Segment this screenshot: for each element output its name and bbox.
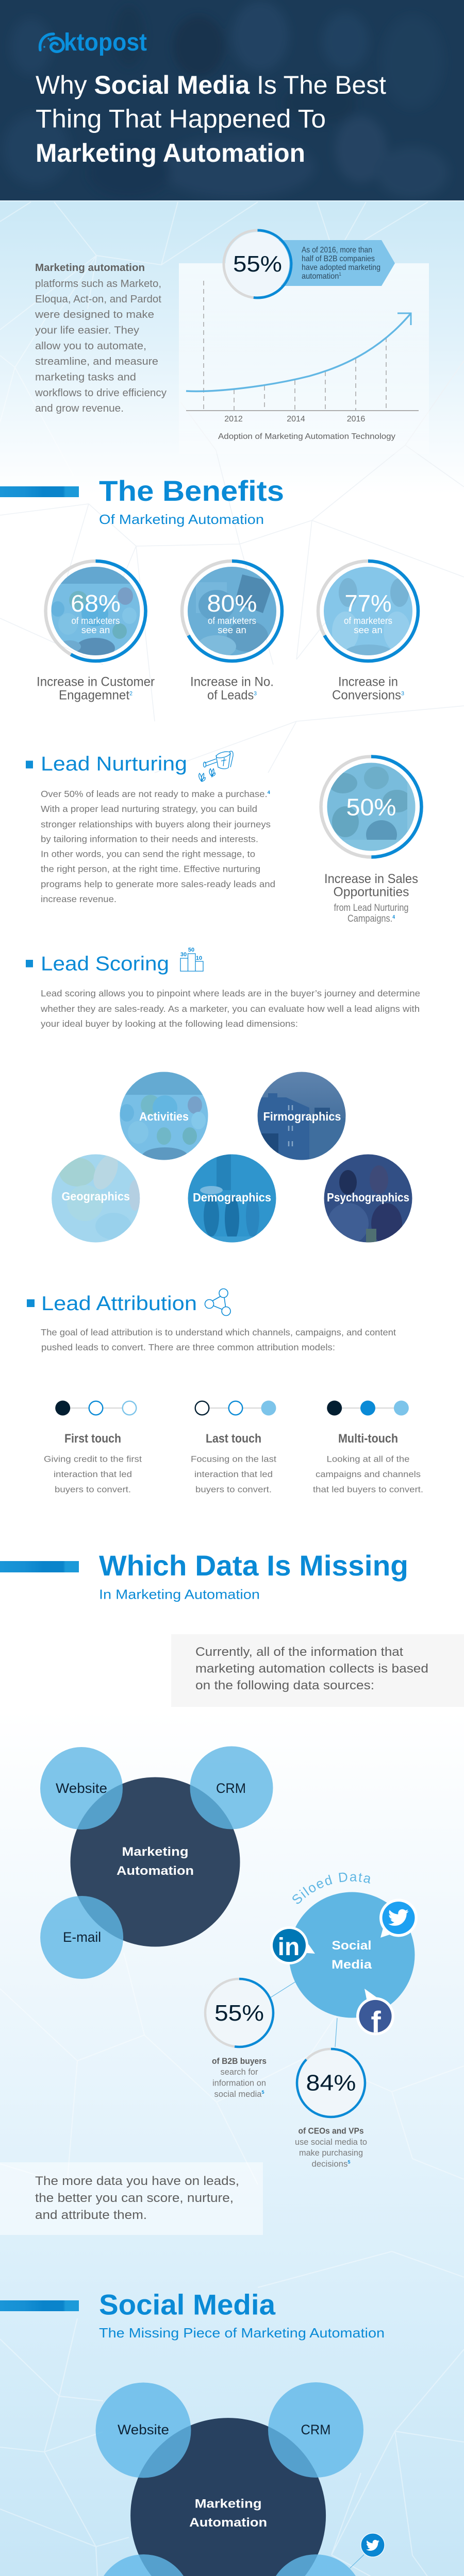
icon: score bars: 10 bbox=[196, 955, 202, 961]
text block: lead nurturing: In other words, you can send the right message, to bbox=[41, 849, 255, 859]
text block: lead attribution: The goal of lead attribution is to understand which channels, campaigns, and content bbox=[41, 1327, 396, 1337]
panel: more data callout: The more data you have on leads, bbox=[35, 2174, 239, 2188]
text block: lead nurturing: programs help to generate more sales-ready leads and bbox=[41, 879, 275, 889]
attribution model: first touch: buyers to convert. bbox=[55, 1485, 131, 1494]
icon: linkedin bubble: in bbox=[278, 1934, 300, 1961]
attribution model: last touch: buyers to convert. bbox=[195, 1485, 272, 1494]
stat: 55% of B2B buyers: 55% bbox=[214, 2001, 264, 2026]
stat: 50% sales opportunities: from Lead Nurturing bbox=[334, 903, 408, 913]
heading: Lead Scoring bbox=[26, 947, 203, 975]
dimension: Geographics bbox=[52, 1154, 140, 1243]
dimension: Geographics: Geographics bbox=[61, 1190, 130, 1203]
dimension: Demographics bbox=[186, 1154, 278, 1244]
attribution model: first touch: Giving credit to the first bbox=[44, 1455, 142, 1464]
diagram: marketing automation data sources: Marketing bbox=[122, 1845, 189, 1859]
attribution model: multi-touch: Looking at all of the bbox=[327, 1455, 409, 1464]
text block: lead nurturing: 4 bbox=[268, 790, 270, 795]
stat ring: 55%: 55% bbox=[233, 251, 282, 277]
text block: lead attribution: pushed leads to convert. There are three common attribution models: bbox=[41, 1342, 335, 1352]
stat: 84% of CEOs and VPs: of CEOs and VPs bbox=[298, 2127, 364, 2136]
text block: lead attribution bbox=[41, 1327, 396, 1352]
stat: 68% customer engagement: 68% bbox=[71, 590, 121, 617]
panel: more data callout: the better you can score, nurture, bbox=[35, 2191, 234, 2205]
diagram: marketing automation with social media bbox=[96, 2382, 385, 2576]
stat: 68% customer engagement: Increase in Customer bbox=[37, 675, 155, 689]
attribution model: first touch bbox=[44, 1400, 142, 1494]
icon: facebook bubble bbox=[356, 1989, 394, 2039]
callout: 55% ribbon: automation bbox=[302, 272, 342, 281]
header banner bbox=[0, 0, 464, 200]
icon: watering can bbox=[199, 751, 233, 782]
dimension: Firmographics bbox=[255, 1072, 348, 1162]
stat: 84% of CEOs and VPs: 84% bbox=[306, 2070, 356, 2096]
diagram: siloed social media: Media bbox=[332, 1958, 372, 1972]
stat: 50% sales opportunities: Opportunities bbox=[333, 885, 409, 900]
stat: 80% leads: of Leads bbox=[207, 688, 257, 703]
text block: lead scoring: your ideal buyer by looking at the following lead dimensions: bbox=[41, 1019, 298, 1029]
stat: 77% conversions: 3 bbox=[401, 690, 404, 697]
stat: 55% of B2B buyers: social media bbox=[214, 2090, 261, 2099]
chart: adoption line: 2014 bbox=[287, 415, 305, 423]
intro text block: your life easier. They bbox=[35, 325, 139, 336]
callout: 55% ribbon: 1 bbox=[339, 272, 341, 277]
stat: 80% leads: Increase in No. bbox=[190, 675, 274, 689]
heading: Social Media: The Missing Piece of Marketing Automation bbox=[99, 2325, 385, 2341]
panel: adoption chart bbox=[179, 230, 429, 454]
stat ring: 55% bbox=[224, 230, 291, 298]
intro text block: platforms such as Marketo, bbox=[35, 278, 161, 290]
heading: Lead Nurturing bbox=[26, 751, 233, 782]
intro text block: were designed to make bbox=[35, 309, 154, 320]
diagram: marketing automation data sources: E-mail bbox=[63, 1929, 101, 1945]
text block: lead scoring bbox=[40, 988, 420, 1029]
stat: 50% sales opportunities: Increase in Sales bbox=[324, 872, 418, 886]
stat: 80% leads: 80% bbox=[207, 590, 257, 617]
dimension: Psychographics bbox=[322, 1154, 415, 1244]
stat: 77% conversions: Increase in bbox=[338, 675, 398, 689]
stat: 80% leads: see an bbox=[218, 624, 246, 635]
icon: network nodes bbox=[205, 1289, 230, 1316]
dimension: Demographics: Demographics bbox=[193, 1191, 271, 1204]
attribution model: last touch: Last touch bbox=[206, 1432, 261, 1446]
panel: data sources intro: on the following data sources: bbox=[195, 1679, 374, 1692]
stat: 55% of B2B buyers: information on bbox=[212, 2078, 266, 2088]
stat: 84% of CEOs and VPs: use social media to bbox=[295, 2138, 367, 2147]
attribution model: first touch: interaction that led bbox=[54, 1470, 132, 1479]
title: Marketing Automation bbox=[36, 139, 305, 167]
icon: facebook bubble: f bbox=[371, 2006, 381, 2039]
heading: Lead Scoring: Lead Scoring bbox=[41, 953, 169, 975]
icon: score bars bbox=[180, 947, 203, 971]
callout: 55% ribbon bbox=[278, 240, 395, 286]
dimension: Activities: Activities bbox=[139, 1110, 189, 1123]
stat: 77% conversions: see an bbox=[354, 624, 383, 635]
stat: 50% sales opportunities bbox=[321, 756, 422, 924]
stat: 80% leads: of marketers bbox=[208, 615, 256, 626]
stat: 84% of CEOs and VPs: decisions bbox=[311, 2160, 347, 2169]
intro text block: Marketing automation bbox=[35, 262, 145, 274]
panel: data sources intro bbox=[171, 1634, 464, 1707]
heading: Which Data Is Missing: In Marketing Automation bbox=[99, 1587, 260, 1602]
stat: 84% of CEOs and VPs: 5 bbox=[347, 2160, 351, 2165]
heading: Lead Attribution: Lead Attribution bbox=[41, 1293, 197, 1315]
stat: 55% of B2B buyers: of B2B buyers bbox=[212, 2057, 267, 2066]
text block: lead nurturing: increase revenue. bbox=[41, 894, 117, 904]
intro text block: allow you to automate, bbox=[35, 341, 146, 352]
diagram: marketing automation with social media: CRM bbox=[301, 2422, 331, 2437]
text block: lead nurturing: the right person, at the right time. Effective nurturing bbox=[41, 863, 260, 874]
attribution model: last touch: Focusing on the last bbox=[191, 1455, 276, 1464]
stat: 68% customer engagement: see an bbox=[81, 624, 110, 635]
chart: adoption line bbox=[186, 281, 419, 441]
callout: 55% ribbon: have adopted marketing bbox=[302, 263, 380, 272]
icon: score bars: 50 bbox=[188, 947, 194, 953]
heading: The Benefits: The Benefits bbox=[99, 474, 284, 507]
diagram: marketing automation data sources: CRM bbox=[216, 1781, 246, 1796]
dimension: Activities bbox=[120, 1072, 208, 1160]
text block: lead scoring: whether they are sales-ready. As a marketer, you can evaluate how well a lead aligns with bbox=[40, 1004, 420, 1014]
title: Thing That Happened To bbox=[36, 104, 326, 133]
diagram: marketing automation data sources: Automation bbox=[117, 1864, 194, 1878]
text block: lead nurturing: by tailoring information to their needs and interests. bbox=[41, 834, 258, 844]
attribution model: multi-touch: Multi-touch bbox=[338, 1432, 398, 1446]
stat: 80% leads: 3 bbox=[254, 690, 257, 697]
diagram: siloed social media: Social bbox=[332, 1939, 371, 1953]
stat: 68% customer engagement: 2 bbox=[129, 690, 132, 697]
text block: lead scoring: Lead scoring allows you to pinpoint where leads are in the buyer’s journey and determine bbox=[41, 988, 420, 998]
panel: data sources intro: Currently, all of the information that bbox=[195, 1645, 403, 1659]
dimension: Firmographics: Firmographics bbox=[263, 1110, 341, 1123]
attribution model: multi-touch: that led buyers to convert. bbox=[313, 1485, 423, 1494]
stat: 77% conversions bbox=[318, 561, 418, 703]
heading: Social Media: Social Media bbox=[99, 2289, 276, 2320]
stat: 80% leads bbox=[182, 561, 282, 703]
stat: 84% of CEOs and VPs: make purchasing bbox=[299, 2148, 363, 2158]
attribution model: last touch bbox=[191, 1400, 276, 1494]
label: Siloed Data: Siloed Data bbox=[292, 1872, 370, 1904]
attribution model: multi-touch bbox=[313, 1400, 423, 1494]
stat: 68% customer engagement: Engagemnet bbox=[59, 688, 132, 703]
attribution model: last touch: interaction that led bbox=[194, 1470, 273, 1479]
callout: 55% ribbon: half of B2B companies bbox=[302, 255, 375, 263]
intro text block bbox=[35, 262, 167, 414]
diagram: siloed social media bbox=[270, 1872, 418, 2047]
icon: twitter bbox=[361, 2533, 385, 2557]
text block: lead nurturing: stronger relationships with buyers along their journeys bbox=[41, 819, 271, 829]
heading: Lead Attribution bbox=[27, 1289, 230, 1316]
stat: 77% conversions: Conversions bbox=[332, 688, 404, 703]
heading: Which Data Is Missing bbox=[0, 1549, 408, 1602]
text block: lead nurturing bbox=[41, 789, 275, 904]
intro text block: streamline, and measure bbox=[35, 356, 158, 367]
chart: adoption line: 2016 bbox=[347, 415, 365, 423]
stat: 50% sales opportunities: Campaigns. bbox=[347, 913, 400, 924]
stat: 50% sales opportunities: 50% bbox=[346, 793, 396, 820]
heading: Lead Nurturing: Lead Nurturing bbox=[41, 753, 187, 775]
stat: 55% of B2B buyers bbox=[205, 1979, 273, 2099]
stat: 55% of B2B buyers: 5 bbox=[261, 2090, 264, 2095]
diagram: marketing automation with social media: Marketing bbox=[195, 2497, 262, 2511]
logo: Oktopost: ktopost bbox=[64, 29, 147, 56]
panel: data sources intro: marketing automation collects is based bbox=[195, 1662, 428, 1675]
stat: 77% conversions: 77% bbox=[344, 590, 392, 617]
stat: 55% of B2B buyers: search for bbox=[221, 2067, 258, 2077]
heading: Social Media bbox=[0, 2289, 385, 2341]
heading: The Benefits bbox=[0, 474, 284, 527]
intro text block: and grow revenue. bbox=[35, 403, 124, 414]
attribution model: first touch: First touch bbox=[64, 1432, 121, 1446]
callout: 55% ribbon: As of 2016, more than bbox=[302, 246, 372, 255]
panel: more data callout: and attribute them. bbox=[35, 2208, 147, 2222]
diagram: marketing automation data sources bbox=[40, 1747, 273, 1979]
icon: twitter bubble bbox=[379, 1899, 418, 1938]
icon: linkedin bubble bbox=[270, 1926, 315, 1964]
dimension: Psychographics: Psychographics bbox=[327, 1191, 409, 1204]
diagram: marketing automation with social media: Automation bbox=[189, 2516, 267, 2530]
title: Why Social Media Is The Best bbox=[36, 71, 386, 99]
stat: 77% conversions: of marketers bbox=[344, 615, 392, 626]
heading: The Benefits: Of Marketing Automation bbox=[99, 512, 264, 527]
text block: lead nurturing: Over 50% of leads are not ready to make a purchase. bbox=[41, 789, 255, 799]
stat: 84% of CEOs and VPs bbox=[295, 2049, 367, 2169]
title bbox=[36, 71, 386, 167]
diagram: marketing automation with social media: Website bbox=[118, 2422, 169, 2437]
intro text block: marketing tasks and bbox=[35, 372, 136, 383]
intro text block: workflows to drive efficiency bbox=[35, 387, 167, 399]
heading: Which Data Is Missing: Which Data Is Missing bbox=[99, 1549, 408, 1582]
chart: adoption line: 2012 bbox=[224, 415, 243, 423]
diagram: marketing automation data sources: Website bbox=[56, 1781, 107, 1796]
text block: lead nurturing: With a proper lead nurturing strategy, you can build bbox=[41, 804, 257, 814]
intro text block: Eloqua, Act-on, and Pardot bbox=[35, 294, 161, 305]
attribution model: multi-touch: campaigns and channels bbox=[316, 1470, 421, 1479]
chart: adoption line: Adoption of Marketing Automation Technology bbox=[218, 432, 395, 441]
icon: score bars: 30 bbox=[180, 952, 187, 958]
stat: 68% customer engagement bbox=[37, 561, 155, 703]
stat: 68% customer engagement: of marketers bbox=[71, 615, 120, 626]
stat: 50% sales opportunities: 4 bbox=[392, 914, 395, 920]
panel: more data callout bbox=[0, 2162, 263, 2235]
